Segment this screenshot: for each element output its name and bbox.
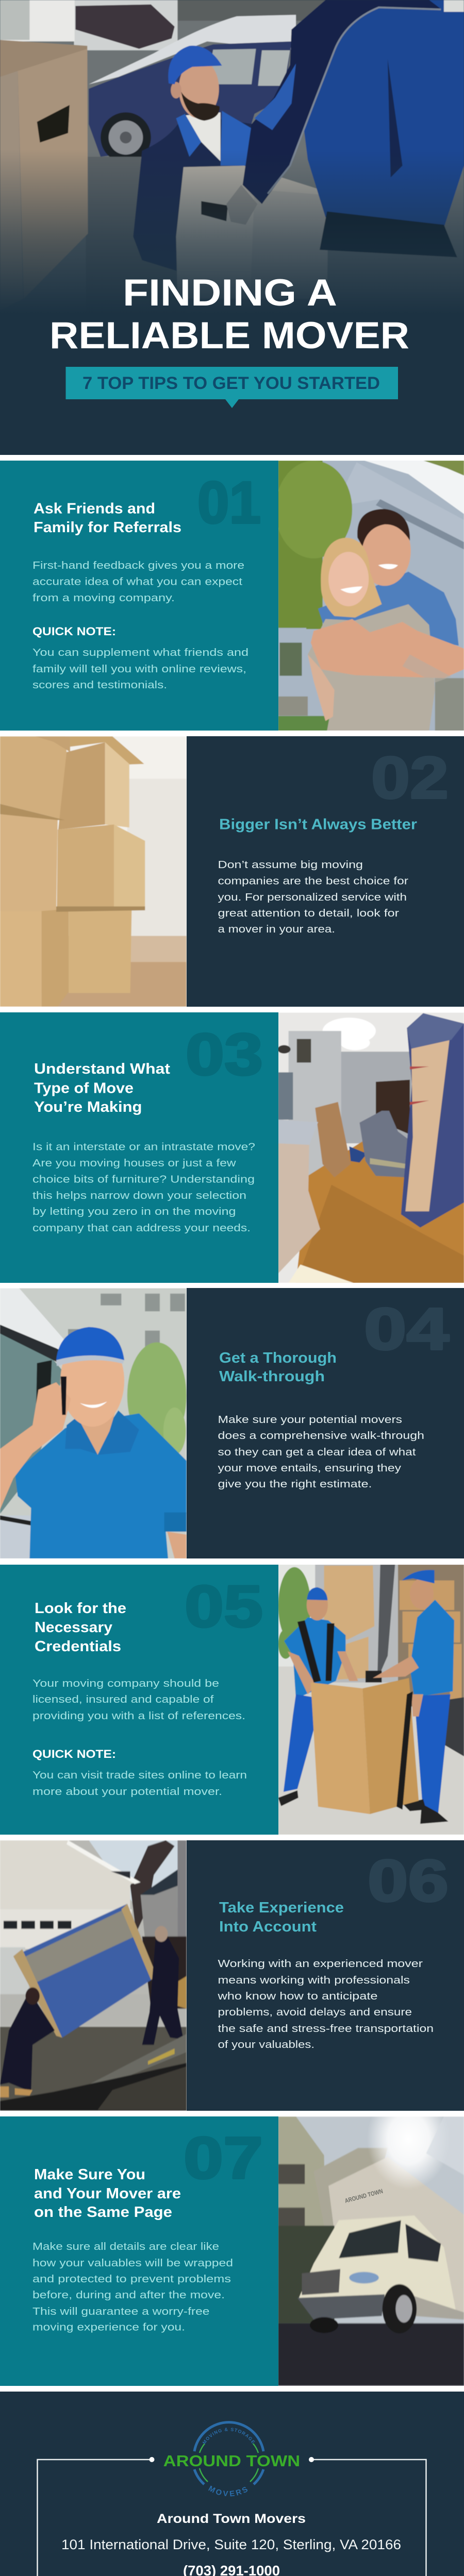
panel: tip 1: [0, 461, 464, 731]
heading: tip 4: [219, 1350, 337, 1385]
photo: stacked cardboard boxes: [0, 736, 187, 1007]
quick note: tip 5: [32, 1748, 247, 1798]
title: RELIABLE MOVER: [49, 315, 409, 357]
body: tip 3: Is it an interstate or an intrastate move?: [32, 1142, 255, 1153]
contact box outline: [37, 2457, 426, 2576]
quick note: tip 5: QUICK NOTE:: [32, 1748, 116, 1760]
subtitle banner: [66, 367, 398, 408]
heading: tip 3: You’re Making: [34, 1099, 142, 1115]
body: tip 4: Make sure your potential movers: [218, 1414, 402, 1426]
heading: tip 6: Into Account: [219, 1919, 317, 1935]
body: tip 7: before, during and after the move.: [32, 2290, 225, 2301]
body: tip 3: Are you moving houses or just a few: [32, 1158, 236, 1169]
body: tip 5: providing you with a list of references.: [32, 1710, 245, 1722]
photo: movers carrying furniture up ramp: [0, 1840, 187, 2111]
body: tip 6: who know how to anticipate: [217, 1991, 377, 2002]
heading: tip 7: and Your Mover are: [34, 2185, 181, 2202]
photo: mover on phone beside van: [0, 1289, 187, 1558]
panel: tip 3: [0, 1012, 464, 1283]
company name: Around Town Movers: [157, 2512, 306, 2526]
body: tip 3: choice bits of furniture? Understanding: [32, 1174, 255, 1185]
truck logo text: AROUND TOWN: [344, 2188, 384, 2205]
body: tip 3: company that can address your needs.: [32, 1223, 251, 1234]
body: tip 1: [32, 560, 244, 604]
heading: tip 4: Walk-through: [219, 1368, 325, 1385]
body: tip 3: this helps narrow down your selection: [32, 1190, 246, 1201]
quick note: tip 5: You can visit trade sites online to learn: [32, 1770, 247, 1781]
body: tip 6: means working with professionals: [218, 1975, 410, 1986]
hero fade overlay: [0, 149, 464, 455]
body: tip 1: accurate idea of what you can expect: [32, 576, 243, 587]
panel: tip 5: [0, 1565, 464, 1835]
body: tip 2: great attention to detail, look for: [218, 908, 399, 919]
heading: tip 7: Make Sure You: [34, 2166, 145, 2183]
photo: two movers with large box: [278, 1565, 464, 1835]
photo: furniture wrapped for moving: [277, 1012, 464, 1283]
body: tip 7: This will guarantee a worry-free: [32, 2306, 209, 2317]
photo: Around Town moving truck: [278, 2088, 464, 2386]
body: tip 7: how your valuables will be wrapped: [32, 2258, 233, 2269]
body: tip 2: companies are the best choice for: [218, 876, 408, 887]
body: tip 1: from a moving company.: [32, 592, 175, 604]
body: tip 6: [217, 1958, 434, 2050]
address: 101 International Drive, Suite 120, Sterling, VA 20166: [61, 2537, 401, 2552]
body: tip 6: the safe and stress-free transportation: [218, 2023, 434, 2035]
body: tip 1: First-hand feedback gives you a more: [32, 560, 244, 571]
heading: tip 3: Understand What: [34, 1061, 170, 1077]
number 06: 06: [368, 1848, 449, 1914]
number 07: 07: [184, 2125, 263, 2191]
logo: Around Town Movers: MOVERS: [208, 2485, 247, 2497]
heading: tip 3: Type of Move: [34, 1080, 134, 1096]
number 05: 05: [185, 1573, 263, 1639]
body: tip 2: Don’t assume big moving: [218, 859, 363, 871]
body: tip 2: you. For personalized service with: [218, 892, 407, 903]
heading: tip 5: Credentials: [35, 1638, 121, 1655]
heading: tip 4: Get a Thorough: [219, 1350, 337, 1366]
body: tip 4: does a comprehensive walk-through: [218, 1430, 424, 1442]
quick note: tip 1: You can supplement what friends and: [32, 647, 248, 658]
number 03: 03: [186, 1022, 263, 1088]
body: tip 7: and protected to prevent problems: [32, 2274, 231, 2285]
panel: tip 7: [0, 2088, 464, 2386]
logo: Around Town Movers: MOVING & STORAGE: [202, 2428, 255, 2444]
body: tip 3: by letting you zero in on the moving: [32, 1206, 236, 1217]
heading: tip 2: Bigger Isn’t Always Better: [219, 816, 417, 833]
body: tip 2: [218, 859, 408, 935]
body: tip 5: [32, 1678, 245, 1722]
quick note: tip 1: [32, 625, 248, 691]
heading: tip 5: Necessary: [35, 1619, 112, 1636]
hero photo: movers carrying boxes: [0, 0, 464, 325]
logo: Around Town Movers: [163, 2421, 300, 2497]
quick note: tip 1: family will tell you with online reviews,: [32, 664, 246, 675]
body: tip 6: of your valuables.: [218, 2039, 314, 2050]
heading: tip 7: on the Same Page: [34, 2204, 172, 2221]
body: tip 7: [32, 2241, 233, 2333]
body: tip 4: your move entails, ensuring they: [218, 1463, 401, 1474]
panel: tip 6: [0, 1840, 464, 2111]
number 01: 01: [197, 470, 261, 536]
panel: tip 4: [0, 1288, 464, 1558]
quick note: tip 1: QUICK NOTE:: [32, 625, 116, 638]
heading: tip 3: [34, 1061, 170, 1115]
body: tip 2: a mover in your area.: [218, 924, 335, 935]
heading: tip 1: Ask Friends and: [34, 501, 155, 517]
body: tip 6: problems, avoid delays and ensure: [218, 2007, 412, 2018]
number 02: 02: [371, 745, 449, 811]
body: tip 4: give you the right estimate.: [218, 1479, 372, 1490]
body: tip 6: Working with an experienced mover: [218, 1958, 423, 1970]
heading: tip 5: [35, 1600, 126, 1655]
photo: smiling couple in front of house: [275, 461, 464, 731]
body: tip 4: [218, 1414, 424, 1490]
heading: tip 1: Family for Referrals: [34, 519, 181, 536]
quick note: tip 1: scores and testimonials.: [32, 680, 167, 691]
body: tip 7: Make sure all details are clear like: [32, 2241, 219, 2252]
body: tip 5: licensed, insured and capable of: [32, 1694, 214, 1705]
panel: footer: [37, 2421, 427, 2576]
heading: tip 1: [34, 501, 181, 536]
heading: tip 6: [219, 1900, 344, 1935]
body: tip 3: [32, 1142, 255, 1234]
subtitle banner: 7 TOP TIPS TO GET YOU STARTED: [82, 374, 380, 393]
heading: tip 7: [34, 2166, 181, 2221]
panel: tip 2: [0, 736, 464, 1007]
body: tip 4: so they can get a clear idea of what: [218, 1447, 416, 1458]
number 04: 04: [364, 1296, 449, 1362]
panel: hero header: [0, 0, 464, 455]
title: [49, 272, 409, 357]
body: tip 5: Your moving company should be: [32, 1678, 219, 1689]
title: FINDING A: [123, 272, 337, 314]
quick note: tip 5: more about your potential mover.: [32, 1786, 222, 1798]
heading: tip 5: Look for the: [35, 1600, 126, 1617]
logo: Around Town Movers: AROUND TOWN: [163, 2452, 300, 2470]
heading: tip 6: Take Experience: [219, 1900, 344, 1916]
body: tip 7: moving experience for you.: [32, 2321, 185, 2333]
